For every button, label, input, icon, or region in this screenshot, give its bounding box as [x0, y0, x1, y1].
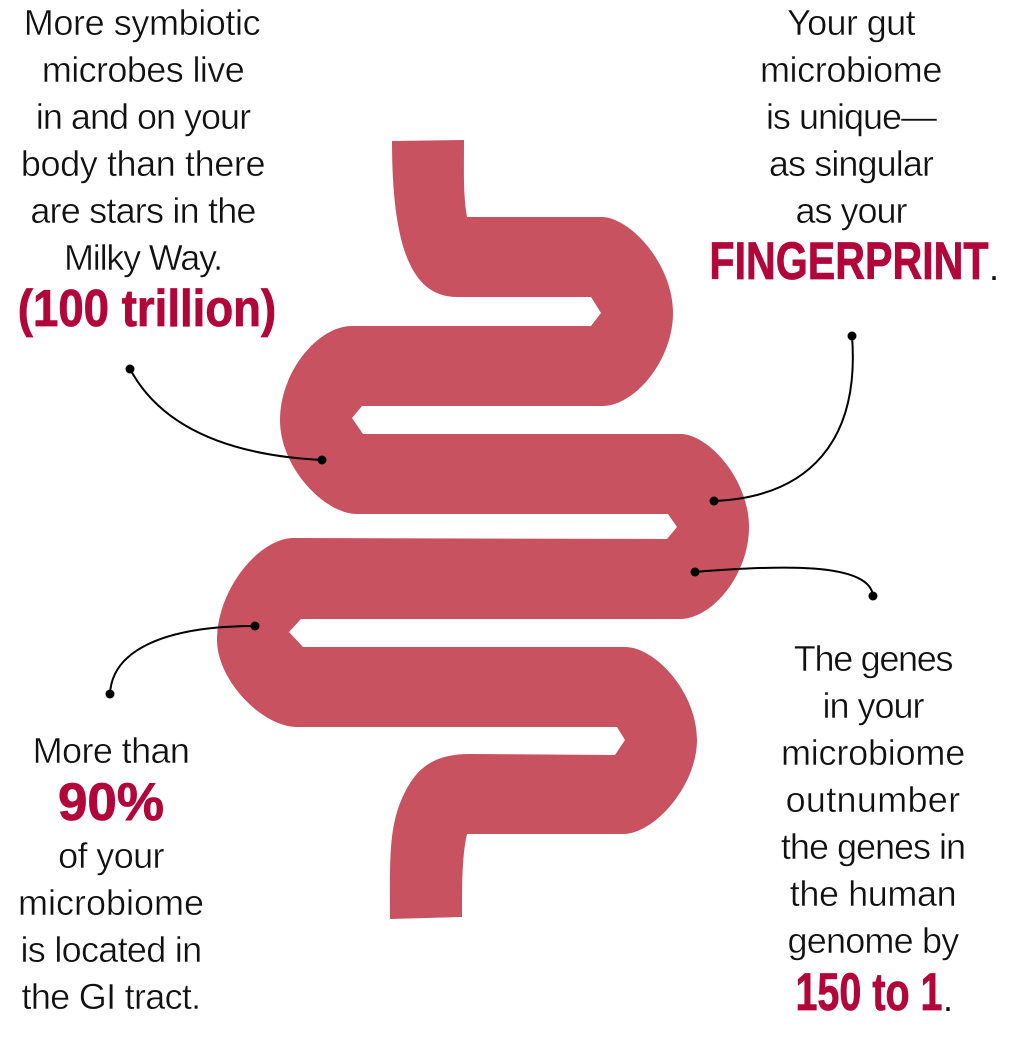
- gut body: [217, 140, 749, 919]
- connector: genes: [690, 568, 878, 600]
- text: fingerprint: as singular: [769, 143, 933, 184]
- connector: fingerprint: [710, 332, 856, 506]
- text: symbiotic microbes: Milky Way.: [64, 237, 222, 278]
- period: .: [943, 978, 953, 1019]
- text: symbiotic microbes: are stars in the: [30, 190, 256, 231]
- text: fingerprint: Your gut: [787, 2, 915, 43]
- text: genes: the genes in: [781, 826, 965, 867]
- text: symbiotic microbes: in and on your: [36, 96, 250, 137]
- text: fingerprint: as your: [795, 190, 907, 231]
- text: of your microbiome: [18, 835, 204, 1017]
- stat: 100 trillion: (100 trillion): [18, 280, 276, 338]
- text: fingerprint: microbiome: [760, 49, 942, 90]
- text: symbiotic microbes: microbes live: [42, 49, 244, 90]
- text: genes: outnumber: [786, 779, 960, 820]
- connector: GI tract: [106, 622, 260, 698]
- text: of your microbiome: of your: [58, 835, 164, 876]
- text: symbiotic microbes: [18, 2, 276, 338]
- text: GI tract: [18, 730, 204, 1017]
- text: genes: in your: [822, 685, 924, 726]
- text: genes: [781, 638, 965, 1022]
- period: .: [989, 247, 999, 288]
- text: of your microbiome: the GI tract.: [22, 976, 200, 1017]
- text: of your microbiome: microbiome: [18, 882, 204, 923]
- connector: milky way: [126, 364, 326, 464]
- highlight: fingerprint: FINGERPRINT: [709, 232, 988, 291]
- text: symbiotic microbes: More symbiotic: [24, 2, 260, 43]
- text: genes: The genes: [794, 638, 952, 679]
- text: genes: genome by: [788, 920, 958, 961]
- stat: 150 to 1: 150 to 1: [795, 963, 942, 1022]
- stat: 90 percent: 90%: [58, 773, 164, 832]
- text: fingerprint: [709, 2, 999, 291]
- text: genes: microbiome: [781, 732, 965, 773]
- text: symbiotic microbes: body than there: [21, 143, 265, 184]
- text: GI tract: More than: [33, 730, 189, 771]
- text: genes: the human: [790, 873, 956, 914]
- text: of your microbiome: is located in: [20, 929, 202, 970]
- text: fingerprint: is unique—: [766, 96, 936, 137]
